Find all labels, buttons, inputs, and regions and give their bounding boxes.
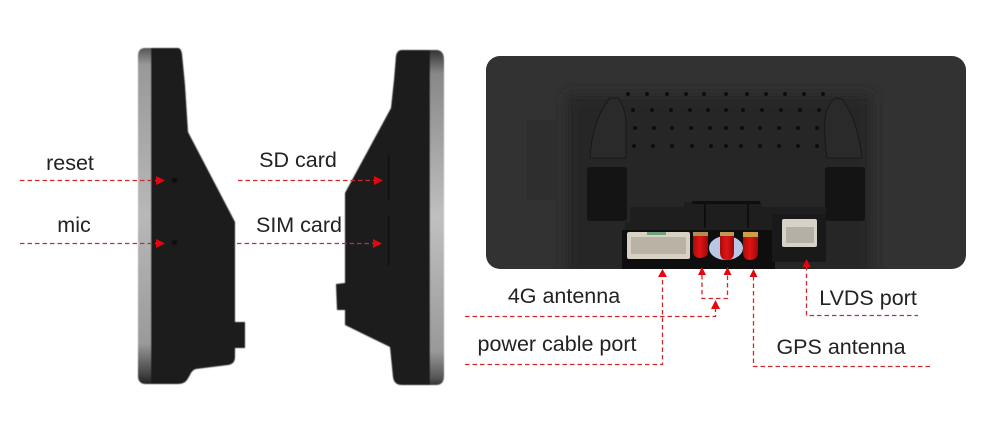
silver bezel <box>138 48 151 384</box>
reset hole <box>172 178 177 183</box>
left flap <box>590 98 626 158</box>
raised centre housing shading <box>566 94 872 280</box>
callout: mic <box>20 213 165 248</box>
antenna bracket <box>692 201 760 228</box>
callout: SD card: SD card <box>259 148 337 172</box>
vent holes <box>626 92 825 148</box>
black rear body <box>345 50 432 385</box>
callout: power cable port: power cable port <box>478 332 637 356</box>
antenna connector 2 <box>720 232 734 260</box>
callout: SD card <box>238 148 383 185</box>
rear view of device <box>486 56 966 280</box>
left side view of device <box>138 48 245 384</box>
lower dark cut-out <box>825 207 826 214</box>
side clip outline <box>527 120 557 200</box>
LVDS connector <box>782 219 817 247</box>
callout: LVDS port: LVDS port <box>819 286 917 310</box>
callout: LVDS port <box>802 259 918 316</box>
callout: SIM card: SIM card <box>256 213 342 237</box>
antenna connector 3 <box>743 232 758 260</box>
callout: mic: mic <box>57 213 91 237</box>
right flap <box>825 98 862 158</box>
callout: 4G antenna: 4G antenna <box>508 284 620 308</box>
callout: SIM card <box>237 213 382 248</box>
right side view of device <box>336 50 444 385</box>
silver bezel <box>430 50 444 385</box>
SIM card slot <box>388 216 390 266</box>
right recess <box>825 167 865 221</box>
power cable connector <box>627 232 690 259</box>
label sticker <box>709 236 743 260</box>
rear panel <box>486 56 966 269</box>
mic hole <box>172 240 177 245</box>
protruding clip <box>232 322 245 348</box>
SD card slot <box>388 155 390 200</box>
left recess <box>587 167 627 221</box>
black rear body <box>148 48 235 384</box>
callout: reset: reset <box>46 151 94 175</box>
callout: power cable port <box>465 269 667 364</box>
callout: GPS antenna <box>750 269 931 366</box>
connector shelf <box>622 230 775 269</box>
callout: GPS antenna: GPS antenna <box>776 335 906 359</box>
protruding clip <box>336 283 345 310</box>
callout: reset <box>20 151 165 185</box>
antenna connector 1 <box>693 232 708 258</box>
callout: 4G antenna <box>465 267 732 316</box>
